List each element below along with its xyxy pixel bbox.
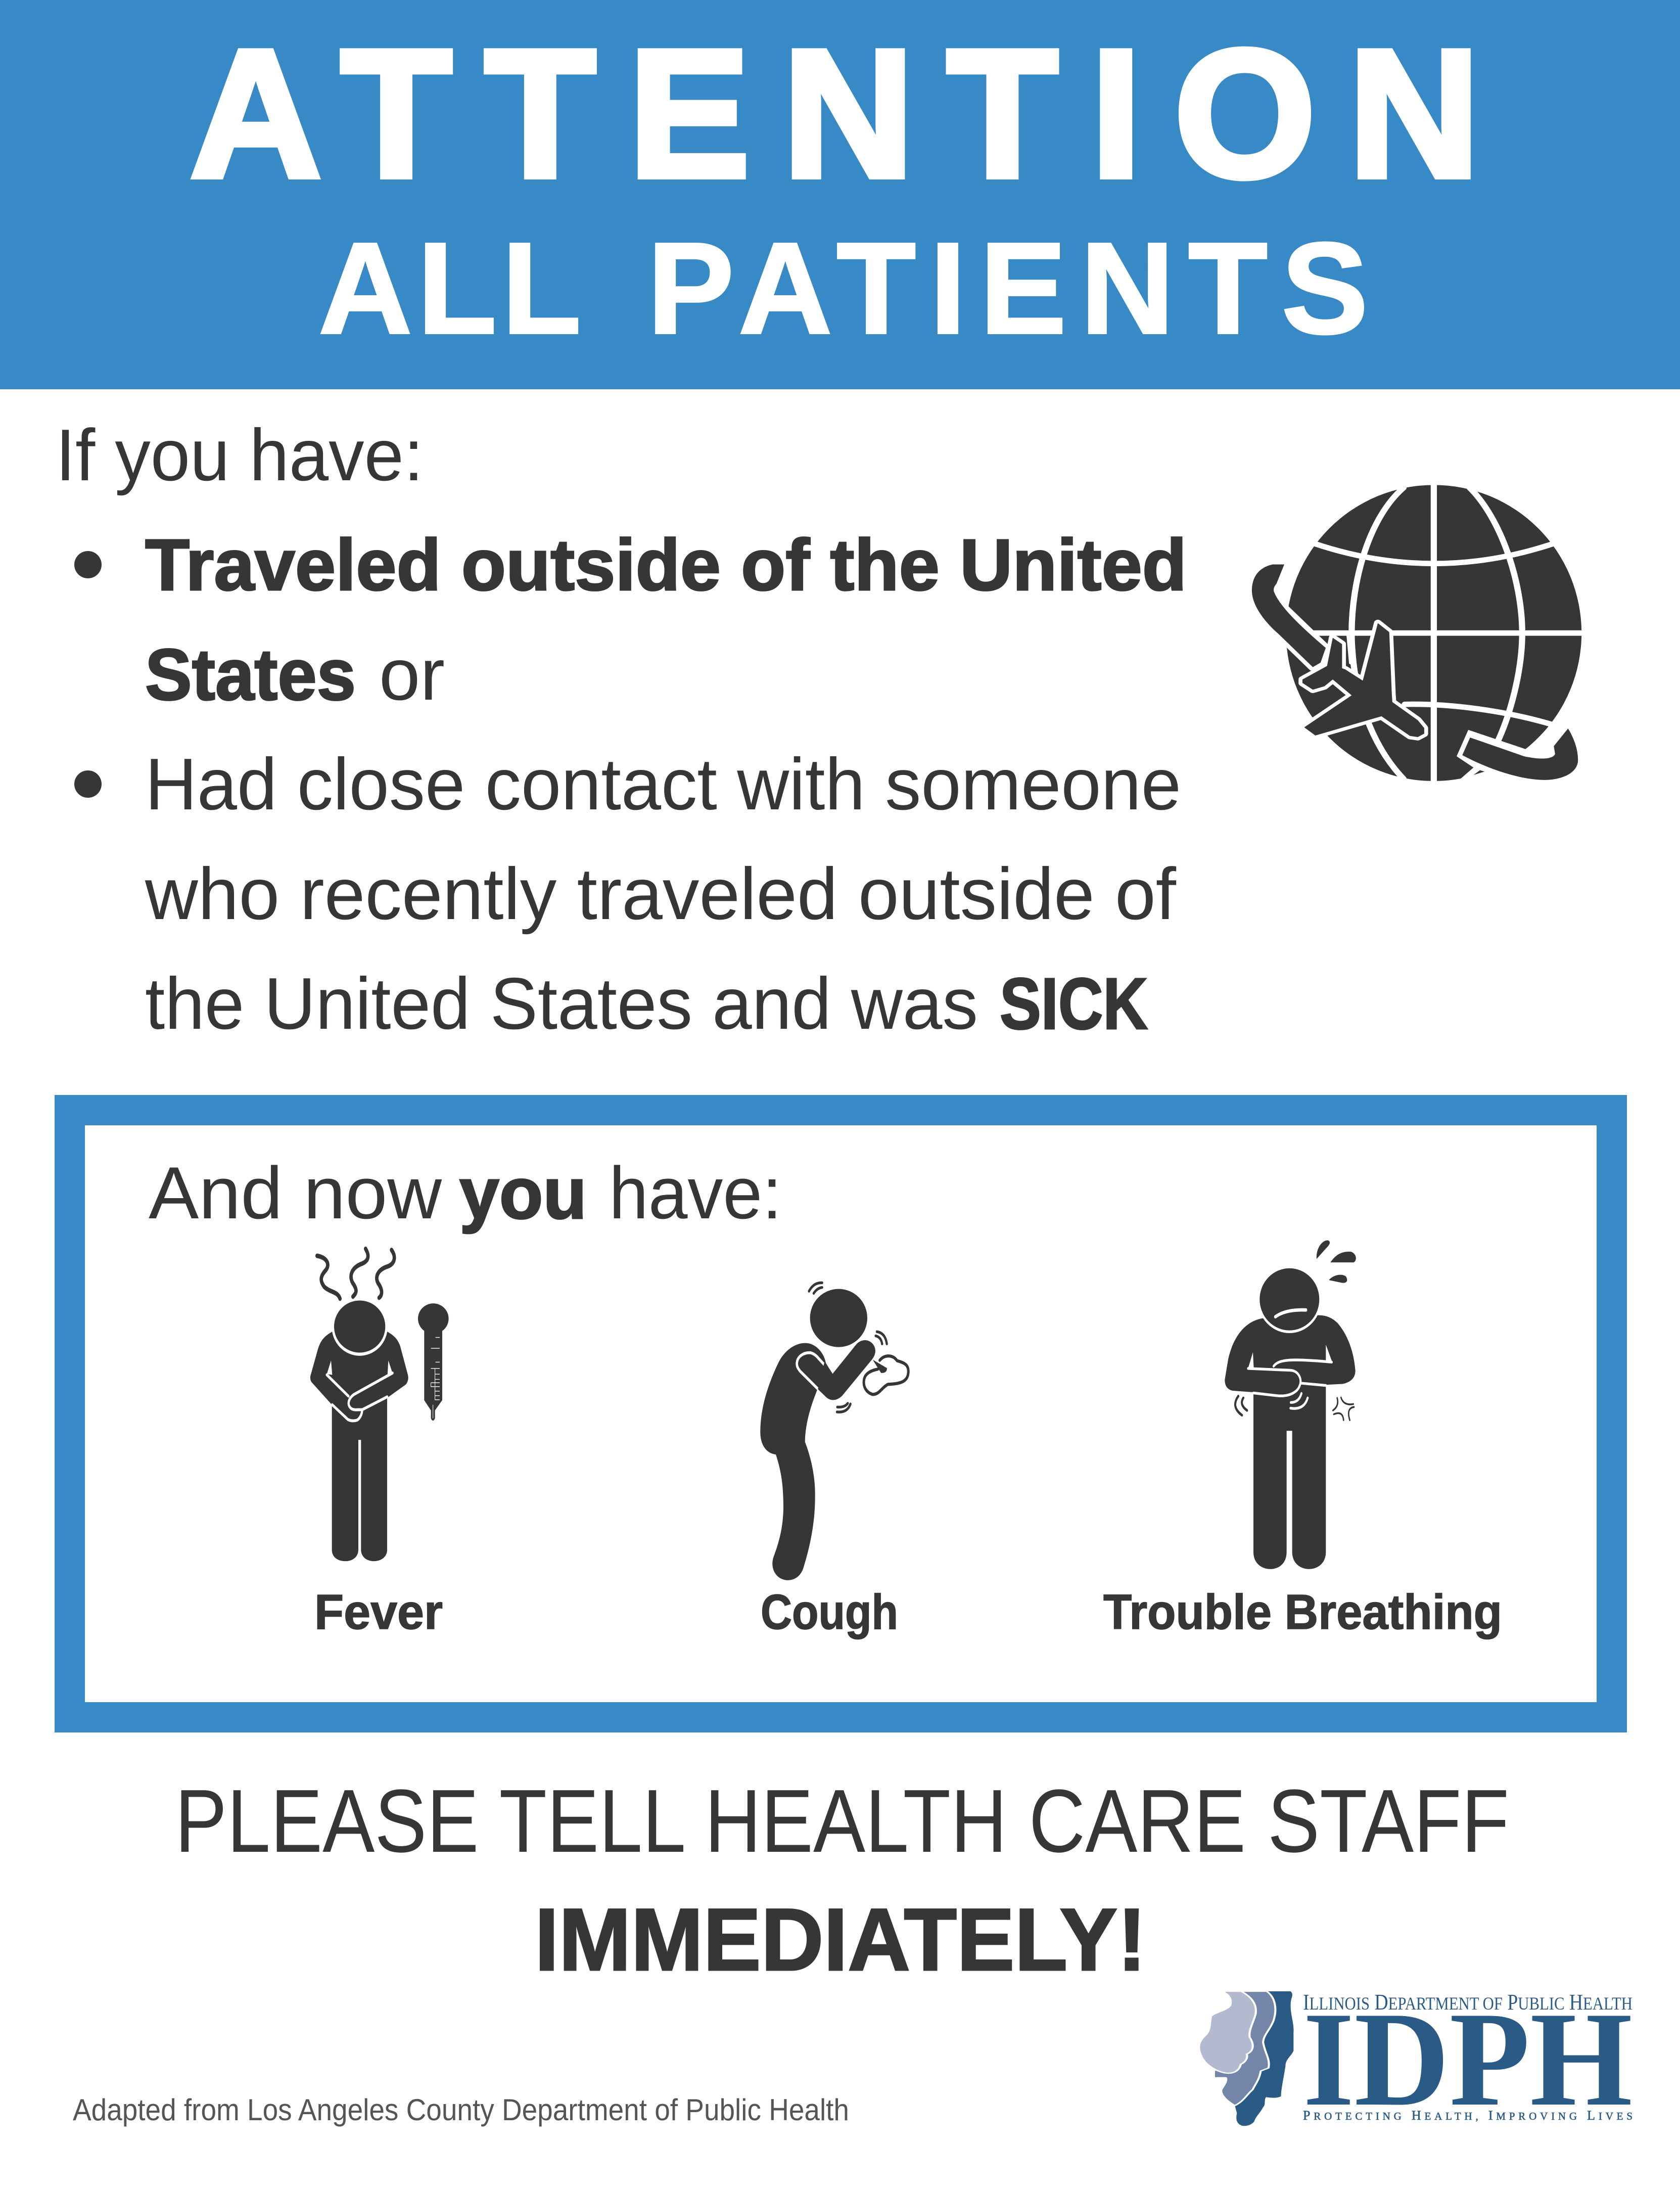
bullet 2 text line 3: SICK (1000, 963, 1148, 1044)
bullet 2 text line 2: who recently traveled outside of (145, 853, 1177, 935)
icon: fever figure (310, 1249, 449, 1561)
bullet 1 text line 2: or (379, 633, 445, 715)
label: trouble breathing: Trouble Breathing (1103, 1584, 1502, 1639)
logo: tagline: P ROTECTING H EALTH, I MPROVING L IVES (1303, 2108, 1632, 2123)
left swoosh (1252, 565, 1326, 667)
subtitle: all patients: ALL (318, 216, 581, 361)
heat waves (317, 1249, 394, 1299)
subtitle: all patients (318, 216, 1368, 361)
cough cloud (864, 1356, 908, 1394)
callout: tell staff: PLEASE TELL HEALTH CARE STAFF (175, 1771, 1509, 1871)
heading: and now you have: have: (609, 1152, 782, 1234)
bullet 1 text line 1: Traveled outside of the United (145, 524, 1187, 606)
text block: travel conditions (56, 414, 1187, 1044)
bullet 1 text line 2: States (145, 634, 356, 715)
label: cough: Cough (761, 1584, 898, 1639)
subtitle: all patients: PATIENTS (647, 216, 1368, 361)
heading: and now you have (149, 1152, 782, 1234)
right swoosh (1457, 726, 1589, 794)
bullet 1 (74, 551, 102, 578)
label: fever: Fever (314, 1584, 443, 1639)
header banner (0, 0, 1680, 389)
heading: and now you have: you (459, 1153, 587, 1234)
logo mark: Illinois faces (1199, 1991, 1294, 2126)
logo: IDPH (1199, 1984, 1632, 2134)
title: attention: ATTENTION (190, 12, 1480, 215)
icon: trouble breathing figure (1225, 1240, 1356, 1569)
sweat drops (1317, 1240, 1356, 1283)
bullet 2 text line 1: Had close contact with someone (145, 743, 1181, 825)
plane (1302, 623, 1424, 737)
source note: Adapted from Los Angeles County Department of Public Health (73, 2093, 849, 2127)
thermometer (418, 1303, 449, 1421)
shake marks (809, 1283, 887, 1412)
panel: symptoms box (70, 1110, 1612, 1717)
icon: globe with plane (1252, 482, 1589, 794)
callout: immediately: IMMEDIATELY! (535, 1891, 1146, 1989)
bullet 2 text line 3: the United States and was (145, 963, 978, 1044)
logo: IDPH letters: IDPH (1303, 1984, 1632, 2134)
bullet 2 (74, 770, 102, 798)
side marks (1235, 1396, 1354, 1420)
logo: department name: ILLINOIS DEPARTMENT OF PUBLIC HEALTH (1303, 1990, 1632, 2015)
heading: and now you have: And now (149, 1152, 442, 1234)
icon: cough figure (760, 1283, 908, 1580)
lead-in: If you have: (56, 414, 424, 496)
